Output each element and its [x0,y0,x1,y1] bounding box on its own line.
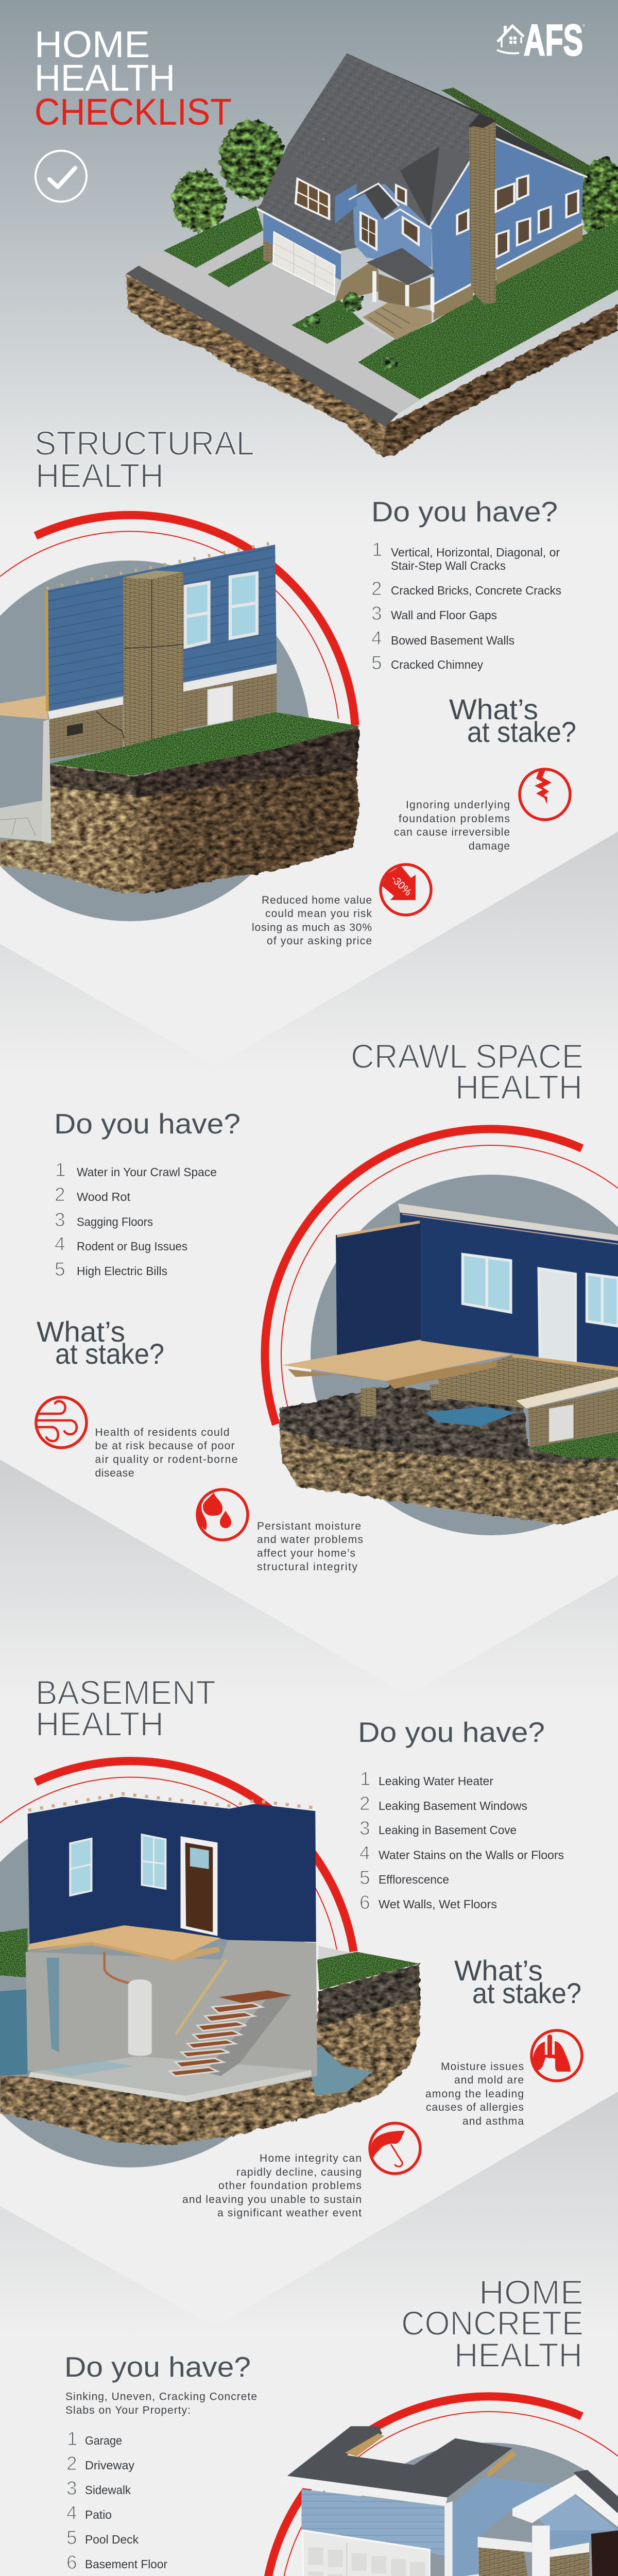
checklist: crawl space: 3 [55,1209,65,1230]
icon: minus 30 percent arrow [381,865,431,915]
text: irreversible damage: damage [469,840,510,852]
floor deck [282,1340,512,1381]
heading: crawl space health [351,1037,583,1106]
text: home integrity: Home integrity can [260,2153,362,2164]
text: moisture issues: Moisture issues [441,2061,524,2073]
garage door [303,2530,430,2576]
checklist: basement: 6 [359,1892,370,1913]
lawn [49,712,359,776]
roof [279,2426,517,2506]
checklist: concrete: 1 [67,2428,78,2449]
checklist: concrete: Garage [85,2434,122,2447]
checklist: concrete: 6 [66,2552,77,2573]
text: persistant moisture: affect your home’s [257,1548,355,1559]
text: home integrity: rapidly decline, causing [236,2166,362,2178]
checklist: structural: Vertical, Horizontal, Diagonal, or [391,546,560,559]
checklist: crawl space: High Electric Bills [77,1264,167,1278]
brick wall [430,2547,532,2576]
heading: home concrete health: HOME [479,2273,583,2311]
icon: water drops [197,1489,248,1540]
lawns [0,1928,420,1990]
backdrop disc and red arcs [265,1129,618,1535]
checklist: structural: Wall and Floor Gaps [391,608,497,622]
text: health of residents: Health of residents could [95,1427,230,1438]
checklist: structural [371,539,561,673]
text: persistant moisture: structural integrity [257,1561,357,1573]
checklist: crawl space: Wood Rot [77,1190,131,1204]
checklist: concrete: 5 [66,2527,77,2548]
heading: crawl space health: CRAWL SPACE [351,1037,583,1075]
icon: minus 30 percent arrow: -30% [389,873,414,898]
checklist: concrete [66,2428,167,2573]
checklist: structural: Cracked Chimney [391,658,483,671]
checklist: basement [359,1768,564,1913]
text: irreversible damage: can cause irreversible [394,826,510,838]
checklist: basement: Leaking Basement Windows [379,1799,527,1812]
panel: crawl space health [36,1037,618,1573]
heading: what's at stake: What’s [454,1954,543,1987]
text: home integrity: and leaving you unable to sustain [182,2194,362,2206]
floor deck [28,1925,221,1962]
soil block [0,1963,420,2145]
house [257,53,587,340]
icon: air [36,1397,87,1448]
icon: crack [520,769,570,820]
heading: what's at stake: at stake? [472,1977,581,2009]
checklist: structural: Cracked Bricks, Concrete Cracks [391,584,561,597]
heading: what's at stake: What’s [449,693,538,725]
panel: basement health [0,1673,582,2219]
checklist: crawl space: Water in Your Crawl Space [77,1165,217,1179]
soil block [126,274,618,457]
text: moisture issues: and asthma [462,2115,524,2127]
text: moisture issues: causes of allergies [426,2102,524,2113]
logo: AFS white: ® [582,24,586,28]
illustration: chimney, wall and soil [0,543,359,893]
heading: what's at stake: at stake? [467,716,576,748]
text: persistant moisture: Persistant moisture [257,1520,361,1532]
interior brick wall [437,1355,618,1409]
heading: do you have: Do you have? [54,1108,241,1140]
garage wall [301,2489,445,2557]
heading: crawl space health: HEALTH [455,1068,582,1106]
soil block [0,726,359,893]
checklist: concrete: Sidewalk [85,2483,131,2497]
logo: AFS white: AFS [524,16,583,65]
heading: home concrete health: CONCRETE [401,2304,583,2342]
icon: check circle [36,150,87,202]
checklist: basement: Leaking in Basement Cove [379,1823,517,1837]
checklist: structural: 2 [371,578,382,599]
text: reduced home value [252,894,372,947]
heading: structural health: HEALTH [36,456,164,495]
checklist: concrete: Basement Floor [85,2557,167,2571]
text: reduced home value: Reduced home value [262,894,372,906]
heading: do you have: Do you have? [371,496,558,528]
checklist: basement: 2 [359,1793,370,1814]
title: CHECKLIST [35,92,232,133]
heading: do you have: Do you have? [358,1716,545,1748]
subfloor joists [288,1361,496,1389]
checklist: concrete: Pool Deck [85,2533,139,2546]
shrubs [304,293,397,369]
intro text: Sinking, Uneven, Cracking Concrete [65,2391,257,2403]
text: persistant moisture [257,1520,363,1573]
brick piers [360,1383,448,1416]
crawl space door [208,686,233,725]
checklist: basement: Leaking Water Heater [379,1774,493,1788]
title: HEALTH [35,58,175,99]
checklist: concrete: 3 [66,2478,77,2499]
lawn [528,1432,618,1458]
checklist: crawl space: Rodent or Bug Issues [77,1240,187,1253]
text: health of residents: disease [95,1467,134,1479]
front brick wall [517,1377,618,1448]
heading: what's at stake [454,1954,581,2009]
heading: what's at stake [37,1315,164,1370]
staircase [169,1960,291,2076]
heading: basement health: HEALTH [36,1705,164,1743]
chimney [123,571,183,751]
text: persistant moisture: and water problems [257,1534,363,1546]
panel: header [35,16,586,202]
text: irreversible damage: Ignoring underlying [406,799,510,811]
side wall [453,2477,552,2576]
soil block [280,1385,618,1525]
checklist: crawl space: 4 [55,1233,65,1255]
porch [512,2470,618,2576]
heading: basement health [36,1673,216,1743]
patio slab [318,1946,394,1962]
heading: home concrete health: HEALTH [454,2336,582,2374]
floor deck [0,696,48,719]
backdrop disc and red arcs [0,1761,353,2167]
illustration: garage and cracked concrete [228,2426,618,2576]
checklist: basement: 4 [359,1842,370,1863]
heading: what's at stake [449,693,576,748]
wall top studs [46,543,272,588]
blue siding wall [47,545,277,711]
lawns [164,206,618,399]
text: moisture issues: among the leading [425,2088,524,2100]
text: reduced home value: could mean you risk [265,908,372,920]
checklist: crawl space: 5 [55,1259,65,1280]
panel: home concrete health [36,2273,618,2576]
panel: structural health [0,424,576,947]
intro text: Slabs on Your Property: [65,2404,191,2416]
heading: what's at stake: at stake? [55,1337,164,1370]
text: moisture issues: and mold are [454,2074,524,2086]
text: reduced home value: losing as much as 30% [252,922,372,934]
heading: what's at stake: What’s [37,1315,125,1348]
text: health of residents: be at risk because of poor [95,1440,235,1452]
illustration: hero house on soil block [126,53,618,457]
text: home integrity [182,2153,362,2219]
checklist: concrete: 2 [66,2453,77,2474]
illustration: crawl space cutaway [280,1204,618,1525]
heading: structural health: STRUCTURAL [35,424,254,462]
windows [296,176,578,257]
heading: home concrete health [401,2273,583,2374]
checklist: basement: 3 [359,1818,370,1839]
concrete basement walls [26,1939,317,2102]
white bands [430,2501,532,2576]
concrete walks and driveway [139,230,421,414]
illustration: basement cutaway [0,1794,420,2145]
checklist: basement: Wet Walls, Wet Floors [379,1897,497,1911]
text: reduced home value: of your asking price [267,935,372,947]
basement floor [28,2056,312,2103]
text: home integrity: other foundation problems [218,2180,362,2192]
title [35,24,232,133]
cracked slab and foundation wall [0,719,51,843]
backdrop disc and red arcs [0,515,355,921]
back lawn [441,88,593,177]
text: moisture issues [425,2061,524,2127]
icon: umbrella [370,2123,420,2174]
text: irreversible damage [394,799,510,852]
checklist: basement: 1 [360,1768,371,1789]
checklist: concrete: Driveway [85,2459,135,2472]
heading: do you have: Do you have? [64,2351,251,2383]
text: irreversible damage: foundation problems [399,813,510,825]
windows and door [462,1255,618,1365]
navy walls [336,1204,618,1367]
water heater [105,1952,152,2056]
checklist: crawl space: Sagging Floors [77,1215,153,1228]
checklist: structural: 1 [372,539,383,560]
checklist: basement: Water Stains on the Walls or Floors [379,1849,564,1862]
checklist: structural: Bowed Basement Walls [391,634,514,647]
street [126,266,398,427]
heading: basement health: BASEMENT [36,1673,216,1711]
checklist: structural: 4 [371,628,382,649]
checklist: structural: 5 [371,652,382,673]
checklist: crawl space: 1 [55,1159,66,1180]
water stain [46,1958,59,2053]
brick base [49,673,277,759]
windows [185,573,257,647]
white band [48,664,277,719]
checklist: basement: 5 [359,1867,370,1888]
icon: lungs [531,2030,582,2081]
checklist: concrete: Patio [85,2508,112,2521]
heading: structural health [35,424,254,495]
backdrop disc and red arcs [264,2396,618,2576]
windows and door [70,1835,217,1936]
checklist: concrete: 4 [66,2502,77,2523]
checklist: structural: 3 [371,603,382,624]
checklist: basement: Efflorescence [379,1873,449,1886]
checklist: crawl space [55,1159,217,1280]
intro text [65,2391,257,2416]
checklist: structural: Stair-Step Wall Cracks [391,559,506,572]
puddle [426,1406,517,1426]
text: health of residents: air quality or rodent-borne [95,1454,238,1465]
title: HOME [35,24,150,65]
text: health of residents [95,1427,238,1479]
navy wall [28,1797,316,1944]
checklist: crawl space: 2 [55,1184,65,1205]
wall top studs [28,1794,315,1810]
logo: AFS white [497,16,586,65]
text: home integrity: a significant weather event [217,2207,362,2219]
trees [172,119,618,245]
